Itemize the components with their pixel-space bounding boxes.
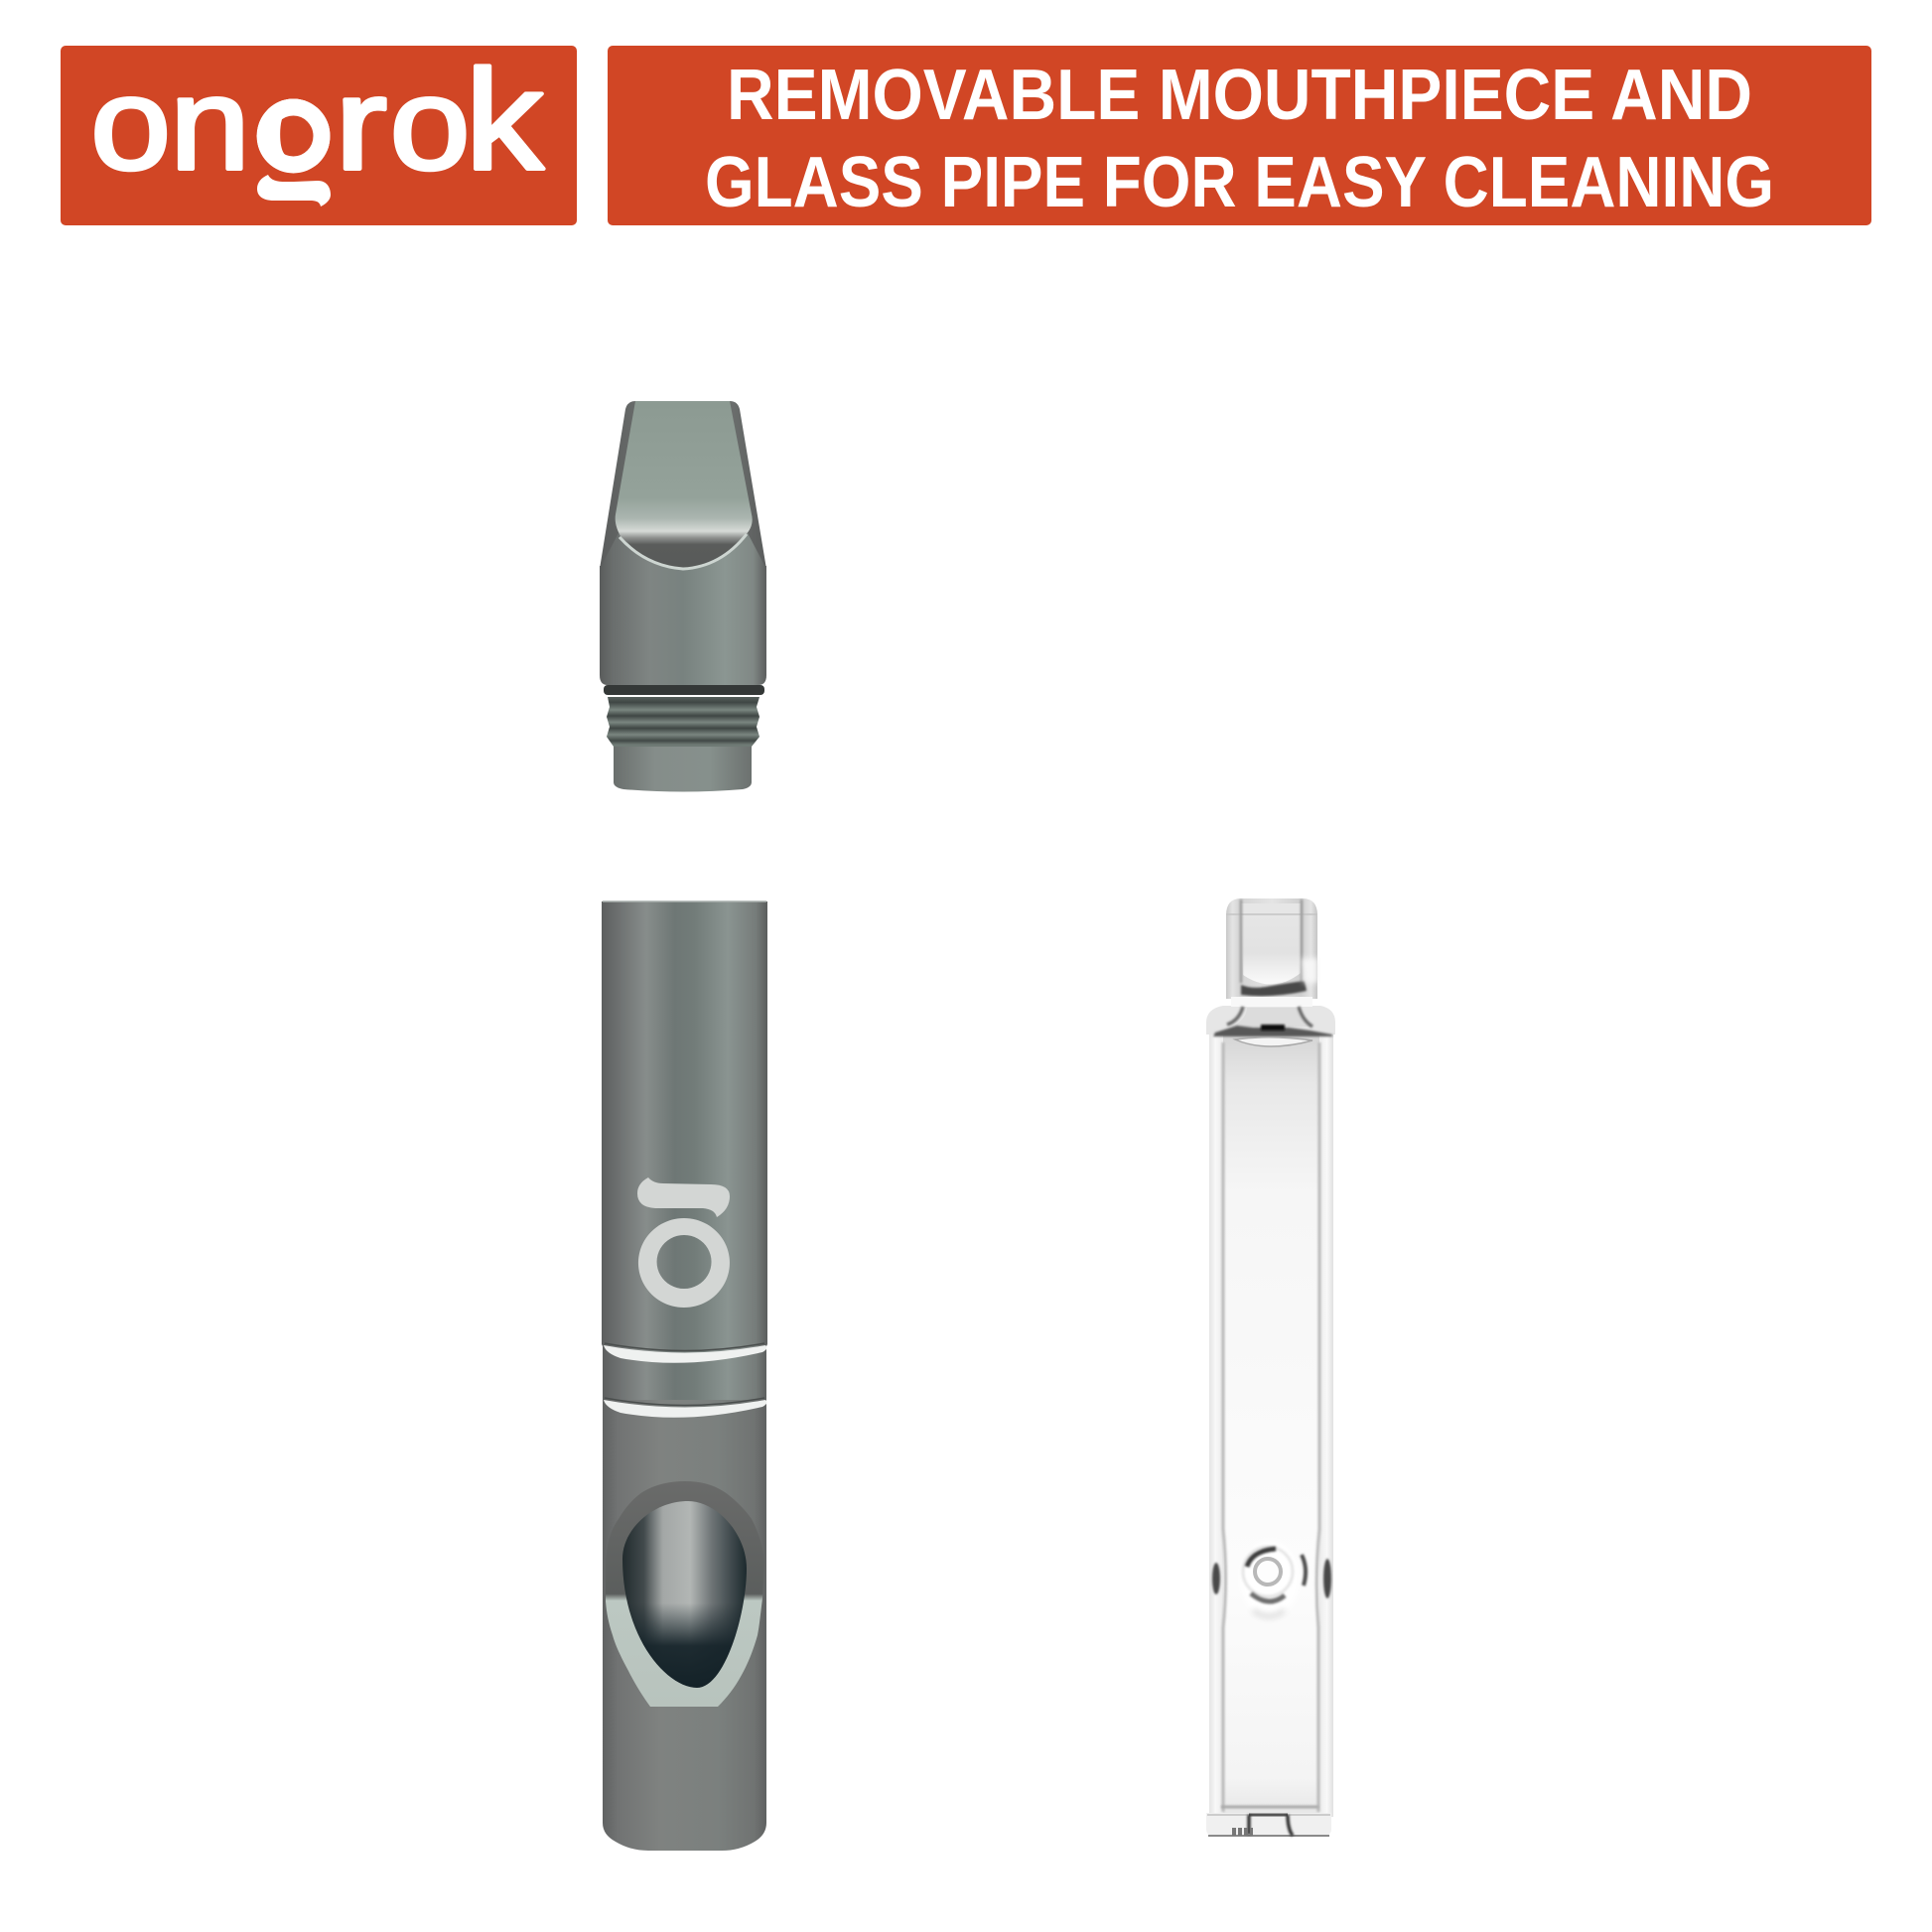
metal mouthpiece <box>600 401 766 792</box>
angled flat facet <box>616 401 753 568</box>
groove ring two <box>604 1398 766 1418</box>
engraved logo mark <box>637 1177 730 1308</box>
glass side carb hole <box>1212 1541 1331 1616</box>
headline text: REMOVABLE MOUTHPIECE AND <box>727 56 1752 135</box>
logo wordmark: ongrok: g <box>259 51 339 198</box>
logo panel <box>61 41 577 225</box>
logo wordmark: ongrok: r <box>335 50 387 197</box>
logo wordmark: ongrok <box>94 64 546 207</box>
metal tube body <box>602 901 767 1851</box>
cut-out window bevel <box>606 1481 764 1707</box>
groove ring one <box>604 1343 766 1363</box>
logo wordmark: ongrok: o <box>390 51 470 198</box>
cylinder and tapered top <box>600 401 766 569</box>
headline text <box>705 56 1774 222</box>
headline text: GLASS PIPE FOR EASY CLEANING <box>705 143 1774 222</box>
glass mouth neck <box>1226 898 1317 999</box>
logo wordmark: ongrok: n <box>170 51 250 198</box>
glass main body <box>1209 1033 1333 1817</box>
glass flare collar <box>1206 997 1335 1046</box>
glass pipe <box>1206 898 1335 1837</box>
logo wordmark: ongrok: o <box>90 51 171 198</box>
screw thread <box>604 685 764 747</box>
glass foot <box>1206 1807 1331 1837</box>
upper tube <box>602 901 767 1348</box>
logo wordmark: ongrok: k <box>466 41 544 199</box>
headline panel <box>608 46 1871 225</box>
lower tube <box>603 1400 766 1851</box>
cut-out window hole <box>622 1501 747 1688</box>
collar between grooves <box>603 1346 766 1402</box>
threaded base cap <box>614 740 752 792</box>
